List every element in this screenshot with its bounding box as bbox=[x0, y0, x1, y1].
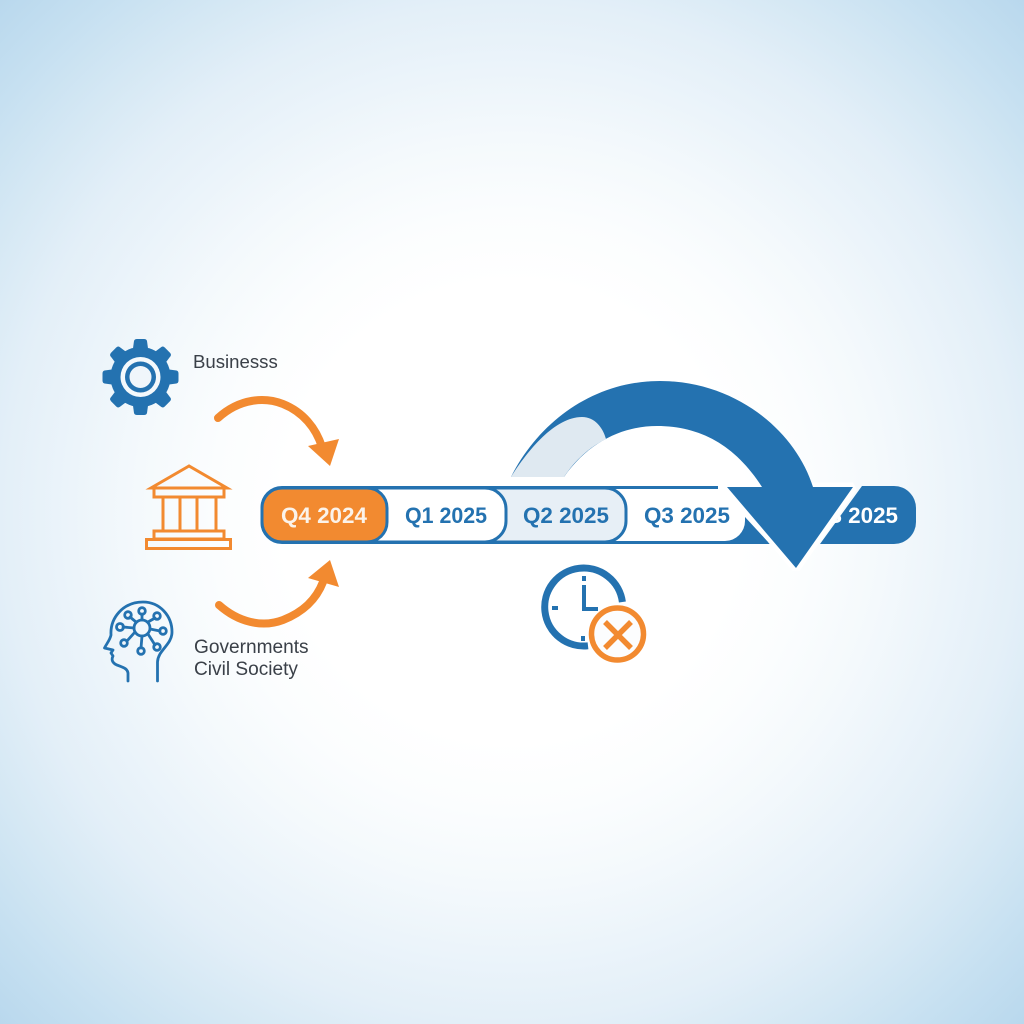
big curved arrow skipping quarters bbox=[511, 381, 853, 568]
arrow: bottom orange curve bbox=[219, 560, 339, 624]
label: Governments, Civil Society: Governments bbox=[194, 637, 309, 658]
segment: Q2 2025: Q2 2025 bbox=[523, 503, 609, 528]
icon: gear bbox=[102, 339, 178, 415]
segment: final quarter end cap: Q3 2025 bbox=[812, 503, 898, 528]
clock face bbox=[545, 568, 622, 646]
segment: Q2 2025 bbox=[485, 488, 626, 542]
segment: Q3 2025 bbox=[606, 489, 770, 544]
cancel mark bbox=[592, 608, 644, 660]
segment: Q4 2024: Q4 2024 bbox=[281, 503, 367, 528]
segment: Q1 2025: Q1 2025 bbox=[405, 503, 487, 528]
segment: Q1 2025 bbox=[365, 488, 506, 542]
label: Businesss: Businesss bbox=[193, 351, 278, 372]
segment: final quarter end cap bbox=[812, 486, 916, 544]
icon: head with neural network bbox=[104, 602, 172, 681]
icon: clock with cancel mark bbox=[545, 568, 644, 660]
bar outline bbox=[262, 488, 768, 542]
label: Governments, Civil Society bbox=[194, 637, 309, 680]
timeline bar bbox=[262, 486, 916, 544]
arrow: top orange curve bbox=[218, 400, 339, 466]
label: Governments, Civil Society: Civil Society bbox=[194, 659, 298, 680]
segment: Q4 2024 bbox=[262, 488, 387, 542]
segment: Q3 2025: Q3 2025 bbox=[644, 503, 730, 528]
icon: government building bbox=[146, 466, 230, 548]
